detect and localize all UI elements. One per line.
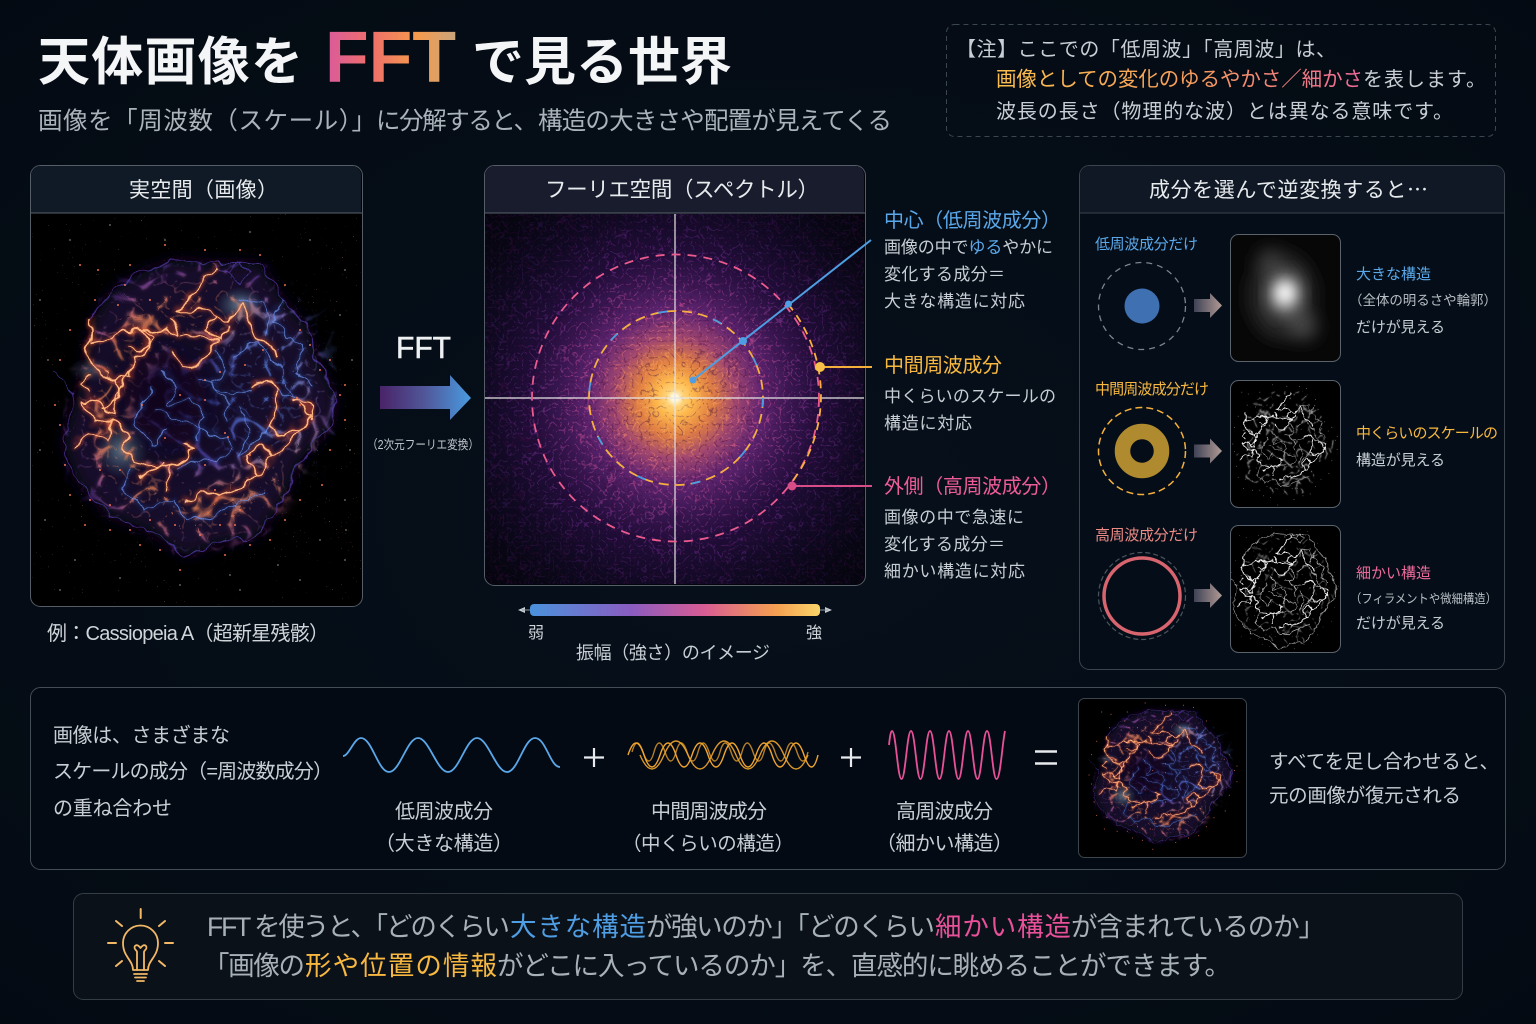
label: low frequency: 低周波成分 [395,800,493,823]
label: low frequency: （大きな構造） [375,832,513,855]
arrow [1194,293,1222,318]
description: fine structure: 細かい構造 [1356,565,1431,582]
thumbnail: reconstructed image [1078,698,1246,858]
image caption: 例：Cassiopeia A（超新星残骸） [47,622,329,645]
takeaway text line 1: が強いのか」「どのくらい [646,912,935,942]
FFT arrow: FFT [396,330,451,365]
panel heading: Fourier space [485,166,865,213]
description: mid structure [1356,425,1498,469]
description: mid structure: 中くらいのスケールの [1356,425,1498,442]
title [38,18,732,98]
callout: low frequency: 画像の中でゆるやかに [884,238,1053,257]
callout: high frequency: 外側（高周波成分） [884,475,1061,498]
thumbnail: mid structure [1230,380,1340,508]
icon: low frequency disc [1098,262,1186,350]
row: mid frequency only [1095,380,1498,508]
amplitude colour bar: 強 [806,624,822,642]
row: high frequency only [1095,526,1497,654]
label: high frequency: 高周波成分 [896,800,993,823]
plus sign [841,748,861,767]
description: large structure: （全体の明るさや輪郭） [1349,293,1497,308]
note box [946,24,1496,136]
callout: mid frequency: 中くらいのスケールの [884,387,1056,406]
text: reconstruction: すべてを足し合わせると、 [1269,751,1499,773]
panel heading: real space: 実空間（画像） [129,179,278,202]
inner dashed frequency ring [589,311,763,485]
takeaway text line 2: 「画像の [203,951,305,981]
outer dashed frequency ring [532,254,821,542]
callout: mid frequency: 構造に対応 [884,414,972,433]
thumbnail: fine structure [1229,526,1340,654]
amplitude colour bar [518,604,832,663]
takeaway text line 2: がどこに入っているのか」を、直感的に眺めることができます。 [497,951,1231,981]
note box: 波長の長さ（物理的な波）とは異なる意味です。 [996,100,1453,123]
text: superposition intro [53,723,333,820]
panel: Fourier space spectrum [484,166,866,586]
chart: mid frequency wave [628,741,818,769]
label: high frequency: （細かい構造） [876,832,1013,855]
callout: high frequency: 変化する成分＝ [884,535,1005,554]
row: low frequency only [1095,234,1497,362]
panel: inverse transform [1080,166,1504,670]
title: FFT [325,18,456,98]
icon: light bulb [108,909,173,981]
thumbnail: blurred large structure [1230,234,1340,362]
callout: mid frequency: 中間周波成分 [884,354,1002,377]
description: mid structure: 構造が見える [1356,452,1445,469]
description: fine structure [1350,565,1497,632]
spectrum image [485,214,865,584]
FFT arrow [367,330,479,452]
callout: high frequency [884,475,1061,581]
description: large structure: 大きな構造 [1356,266,1431,283]
leader line: mid frequency [815,362,872,372]
title: 天体画像を [38,34,303,92]
callout: low frequency: 変化する成分＝ [884,265,1005,284]
callout: high frequency: 画像の中で急速に [884,508,1024,527]
icon: high frequency ring [1098,552,1186,640]
chart: low frequency wave [343,738,560,772]
text: superposition intro: スケールの成分（=周波数成分） [53,760,333,783]
callout: mid frequency [884,354,1056,433]
description: large structure: だけが見える [1356,319,1445,336]
description: large structure [1349,266,1497,336]
arrow [1194,583,1222,608]
note box: 画像としての変化のゆるやかさ／細かさ [996,68,1363,91]
callout: low frequency: 中心（低周波成分） [884,209,1061,232]
row: mid frequency only: 中間周波成分だけ [1095,381,1209,398]
plus sign [584,748,604,767]
takeaway text line 1: 大きな構造 [510,912,646,942]
subtitle: に分解すると、 [376,107,538,135]
label: mid frequency [622,800,794,855]
note box: 【注】ここでの「低周波」「高周波」は、 [956,38,1336,61]
title: で見る世界 [472,34,732,92]
callout: low frequency [884,209,1061,311]
subtitle: 画像を「周波数（スケール）」 [38,107,376,135]
label: high frequency [876,800,1013,855]
label: low frequency [375,800,513,855]
takeaway text line 1: が含まれているのか」 [1071,912,1325,942]
subtitle: 構造の大きさや配置が見えてくる [538,107,892,135]
panel: superposition of components [30,688,1506,870]
callout: low frequency: 大きな構造に対応 [884,292,1025,311]
takeaway text line 2: 形や位置の情報 [305,951,497,981]
label: mid frequency: 中間周波成分 [651,800,767,823]
panel: takeaway [74,894,1462,1000]
FFT arrow: （2次元フーリエ変換） [367,437,479,452]
arrow [1194,438,1222,464]
row: high frequency only: 高周波成分だけ [1095,527,1198,544]
supernova remnant image [31,214,361,605]
callout: high frequency: 細かい構造に対応 [884,562,1025,581]
text: superposition intro: 画像は、さまざまな [53,723,230,747]
icon: mid frequency ring [1098,408,1186,494]
text: reconstruction: 元の画像が復元される [1269,785,1461,807]
description: fine structure: だけが見える [1356,615,1445,632]
panel: real space image [30,166,362,606]
panel heading: Fourier space: フーリエ空間（スペクトル） [545,178,819,202]
takeaway text line 1: 細かい構造 [935,912,1071,942]
note box: を表します。 [1363,68,1486,91]
leader line: high frequency [788,482,872,490]
description: fine structure: （フィラメントや微細構造） [1350,591,1497,606]
panel heading: inverse transform: 成分を選んで逆変換すると… [1149,174,1428,204]
amplitude colour bar: 振幅（強さ）のイメージ [576,643,770,663]
label: mid frequency: （中くらいの構造） [622,833,794,855]
amplitude colour bar: 弱 [528,624,544,642]
row: low frequency only: 低周波成分だけ [1095,236,1198,253]
leader line: low frequency [690,240,871,384]
text: superposition intro: の重ね合わせ [53,797,172,820]
panel heading: inverse transform [1080,166,1504,213]
chart: high frequency wave [889,731,1005,779]
equals sign [1035,752,1057,764]
text: reconstruction [1269,751,1499,807]
takeaway text line 1: FFT を使うと、「どのくらい [207,912,510,942]
panel heading: real space [31,166,362,213]
